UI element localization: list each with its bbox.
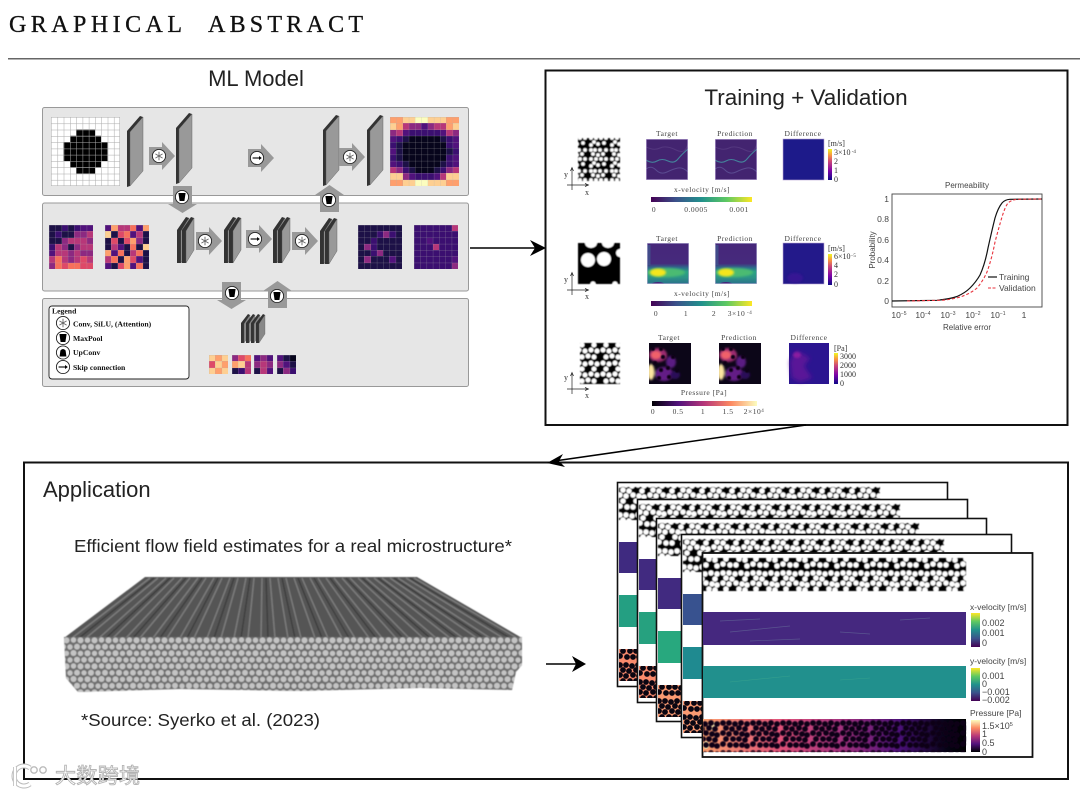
row 3: pressure: Prediction xyxy=(721,333,757,342)
legend: y-velocity: −0.001 xyxy=(982,687,1010,697)
row 3: pressure: 2000 xyxy=(840,361,856,370)
colorbar 3 xyxy=(652,401,757,406)
legend: x-velocity xyxy=(970,602,1026,648)
legend: pressure: 0 xyxy=(982,747,987,757)
line chart: permeability: 1 xyxy=(1022,310,1027,320)
difference heatmap 1 xyxy=(783,139,824,180)
line chart: permeability: −2 xyxy=(975,311,981,317)
legend: y-velocity: −0.002 xyxy=(982,695,1010,705)
arrow: convolution level 2 left xyxy=(196,227,222,255)
legend: pressure xyxy=(970,708,1022,757)
row 3: pressure: 0 xyxy=(840,379,844,388)
row 3: pressure: [Pa] xyxy=(834,344,848,353)
bottleneck heatmap 4 xyxy=(277,355,296,374)
title: graphical abstract: ABSTRACT xyxy=(208,12,363,38)
arrow: maxpool level 1 to 2 xyxy=(168,186,197,213)
line chart: permeability: −3 xyxy=(950,311,956,317)
x-velocity band xyxy=(703,612,966,645)
line chart: permeability: 0.4 xyxy=(877,255,889,265)
row 2: x-velocity large pores: −5 xyxy=(851,254,856,259)
watermark xyxy=(14,765,140,788)
legend: pressure: 1 xyxy=(982,729,987,739)
legend: Legend xyxy=(52,306,77,316)
legend: UpConv xyxy=(73,348,100,357)
line chart: permeability: 0.8 xyxy=(877,214,889,224)
panel: training and validation xyxy=(546,70,1068,425)
line chart: permeability: 10 xyxy=(990,310,1000,320)
row 1: x-velocity fine microstructure: 3×10 xyxy=(834,148,851,157)
line chart: permeability: Permeability xyxy=(945,181,989,190)
row 2: x-velocity large pores: Difference xyxy=(785,234,822,243)
axes 1 xyxy=(567,168,588,190)
y-velocity band xyxy=(703,666,966,698)
row 1: x-velocity fine microstructure: y xyxy=(564,170,568,179)
level 2 background xyxy=(42,203,468,291)
legend: pressure: 5 xyxy=(1010,722,1013,728)
row 2: x-velocity large pores: x-velocity [m/s] xyxy=(674,289,730,298)
line chart: permeability: 0 xyxy=(884,296,889,306)
title: graphical abstract xyxy=(9,12,363,38)
prediction heatmap 3 xyxy=(718,343,761,384)
row 1: x-velocity fine microstructure: 1 xyxy=(834,166,838,175)
heading: Training + Validation: Training + Validation xyxy=(704,85,908,110)
result frame 4 xyxy=(682,534,1012,738)
input binary grid xyxy=(51,117,120,186)
line chart: permeability xyxy=(868,181,1042,332)
row 1: x-velocity fine microstructure: -4 xyxy=(851,150,856,155)
row 3: pressure: 0.5 xyxy=(673,407,683,416)
decoder heatmap C xyxy=(358,225,402,269)
row 2: x-velocity large pores: 0 xyxy=(834,280,838,289)
line chart: permeability: −1 xyxy=(1000,311,1006,317)
row 1: x-velocity fine microstructure: x xyxy=(585,188,589,197)
legend: y-velocity xyxy=(970,656,1026,705)
arrow: model to training xyxy=(470,240,546,256)
arrow: skip connection level 2 xyxy=(246,225,272,253)
row 1: x-velocity fine microstructure: [m/s] xyxy=(828,139,845,148)
legend: x-velocity: 0.001 xyxy=(982,628,1005,638)
line chart: permeability: 0.6 xyxy=(877,235,889,245)
row 2: x-velocity large pores: 0 xyxy=(654,309,658,318)
legend xyxy=(49,306,189,379)
row 2: x-velocity large pores: 3×10 xyxy=(728,309,745,318)
encoder heatmap A xyxy=(49,225,93,269)
row 2: x-velocity large pores: y xyxy=(564,275,568,284)
legend: pressure: 1.5×10 xyxy=(982,721,1010,731)
row 3: pressure: 0 xyxy=(651,407,655,416)
legend: pressure: 0.5 xyxy=(982,738,995,748)
row 2: x-velocity large pores: -4 xyxy=(745,311,752,316)
arrow: skip connection level 1 xyxy=(248,144,274,172)
level 3 background xyxy=(42,298,468,386)
row 2: x-velocity large pores: 2 xyxy=(712,309,716,318)
row 3: pressure: 1.5 xyxy=(723,407,733,416)
result frame 3 xyxy=(656,518,986,722)
result frame 1 xyxy=(618,482,948,686)
line chart: permeability: −5 xyxy=(901,311,907,317)
colorbar 2 xyxy=(651,301,752,306)
level 2 feature maps xyxy=(177,217,337,264)
level 3 feature maps xyxy=(241,314,265,343)
bottleneck heatmap 3 xyxy=(254,355,273,374)
row 1: x-velocity fine microstructure: Prediction xyxy=(717,129,753,138)
result frame 5 (front) xyxy=(702,553,1032,757)
legend: MaxPool xyxy=(73,334,102,343)
arrow: training to application xyxy=(547,425,806,467)
panel: ML model U-Net diagram xyxy=(42,107,469,387)
difference heatmap 2 xyxy=(783,243,824,284)
watermark: 大数跨境 xyxy=(55,765,140,788)
row 2: x-velocity large pores: [m/s] xyxy=(828,244,845,253)
arrow: upconv level 3 to 2 xyxy=(263,281,292,308)
row 1: x-velocity fine microstructure: 0.0005 xyxy=(684,205,708,214)
target heatmap 1 xyxy=(646,139,688,180)
row 1: x-velocity fine microstructure: Difference xyxy=(785,129,822,138)
microstructure image 1 xyxy=(578,138,620,181)
microstructure image 2 xyxy=(578,238,624,287)
line chart: permeability: 10 xyxy=(965,310,975,320)
axes 3 xyxy=(567,372,588,394)
row 2: x-velocity large pores: 2 xyxy=(834,270,838,279)
row 3: pressure: Target xyxy=(658,333,680,342)
line chart: permeability: −4 xyxy=(925,311,931,317)
line chart: permeability: 1 xyxy=(884,194,889,204)
row 2: x-velocity large pores: Prediction xyxy=(717,234,753,243)
line chart: permeability: Probability xyxy=(868,231,877,269)
target heatmap 2 xyxy=(647,243,689,288)
prediction heatmap 1 xyxy=(715,139,757,180)
legend: x-velocity: 0 xyxy=(982,638,987,648)
level 1 feature maps xyxy=(127,113,383,187)
output heatmap level 1 xyxy=(390,117,459,186)
pressure band xyxy=(703,719,966,752)
row 2: x-velocity large pores: 6×10 xyxy=(834,252,851,261)
row 1: x-velocity fine microstructure: x-velocity [m/s] xyxy=(674,185,730,194)
text: efficient flow field estimates: Efficient flow field estimates for a real microstructure* xyxy=(74,536,512,556)
arrow: convolution level 1 right xyxy=(339,143,365,171)
row 3: pressure: y xyxy=(564,373,568,382)
line chart: permeability: Validation xyxy=(999,283,1036,293)
arrow: maxpool level 2 to 3 xyxy=(217,282,246,309)
row 1: x-velocity fine microstructure: Target xyxy=(656,129,678,138)
row 3: pressure: 1 xyxy=(701,407,705,416)
title: graphical abstract: GRAPHICAL xyxy=(9,12,182,38)
row 2: x-velocity large pores: x xyxy=(585,292,589,301)
row 3: pressure: Pressure [Pa] xyxy=(681,388,727,397)
legend: Skip connection xyxy=(73,363,126,372)
row 1: x-velocity fine microstructure: 0 xyxy=(834,175,838,184)
image: 3D fibre microstructure xyxy=(64,577,522,692)
arrow: convolution level 1 left xyxy=(149,142,175,170)
row 3: pressure: 2×10 xyxy=(744,407,761,416)
row 3: pressure: x xyxy=(585,391,589,400)
line chart: permeability: 0.2 xyxy=(877,276,889,286)
prediction heatmap 2 xyxy=(715,243,757,288)
row 2: x-velocity large pores: 1 xyxy=(684,309,688,318)
row 2: x-velocity large pores: 4 xyxy=(834,261,838,270)
level 1 background xyxy=(42,108,468,196)
encoder heatmap B xyxy=(105,225,149,269)
row 3: pressure: Difference xyxy=(791,333,828,342)
row 3: pressure: 3000 xyxy=(840,352,856,361)
stack of flow field results xyxy=(618,482,1032,757)
panel: application xyxy=(24,462,1068,779)
axes 2 xyxy=(567,272,588,295)
legend: x-velocity: x-velocity [m/s] xyxy=(970,602,1026,612)
legend: y-velocity: 0 xyxy=(982,679,987,689)
decoder heatmap D xyxy=(414,225,458,269)
legend: y-velocity: 0.001 xyxy=(982,671,1005,681)
bottleneck heatmap 1 xyxy=(209,355,228,374)
microstructure image 3 xyxy=(580,343,620,384)
arrow: convolution level 2 right xyxy=(292,227,318,255)
row 2: x-velocity large pores: Target xyxy=(656,234,678,243)
row 2: x-velocity large pores xyxy=(564,234,856,318)
row 1: x-velocity fine microstructure: 2 xyxy=(834,157,838,166)
row 3: pressure: 1000 xyxy=(840,370,856,379)
row 3: pressure xyxy=(564,333,856,416)
target heatmap 3 xyxy=(648,343,691,384)
legend: Conv, SiLU, (Attention) xyxy=(73,320,152,328)
bottleneck heatmap 2 xyxy=(232,355,251,374)
legend: y-velocity: y-velocity [m/s] xyxy=(970,656,1026,666)
line chart: permeability: 10 xyxy=(891,310,901,320)
arrow: microstructure to flow fields xyxy=(546,656,586,672)
heading: Application: Application xyxy=(43,477,151,502)
result frame 2 xyxy=(638,500,968,702)
line chart: permeability: Training xyxy=(999,272,1030,282)
line chart: permeability: Relative error xyxy=(943,323,991,332)
row 1: x-velocity fine microstructure: 0.001 xyxy=(729,205,749,214)
row 3: pressure: 4 xyxy=(761,409,764,414)
text: source note: *Source: Syerko et al. (2023) xyxy=(81,710,320,730)
line chart: permeability: 10 xyxy=(940,310,950,320)
heading: ML Model: ML Model xyxy=(208,66,304,91)
row 1: x-velocity fine microstructure: 0 xyxy=(652,205,656,214)
legend: x-velocity: 0.002 xyxy=(982,618,1005,628)
legend: pressure: Pressure [Pa] xyxy=(970,708,1022,718)
colorbar 1 xyxy=(651,197,752,202)
row 1: x-velocity fine microstructure xyxy=(564,129,856,214)
difference heatmap 3 xyxy=(789,343,829,384)
line chart: permeability: 10 xyxy=(915,310,925,320)
microstructure strip xyxy=(703,558,966,591)
arrow: upconv level 2 to 1 xyxy=(315,185,344,212)
